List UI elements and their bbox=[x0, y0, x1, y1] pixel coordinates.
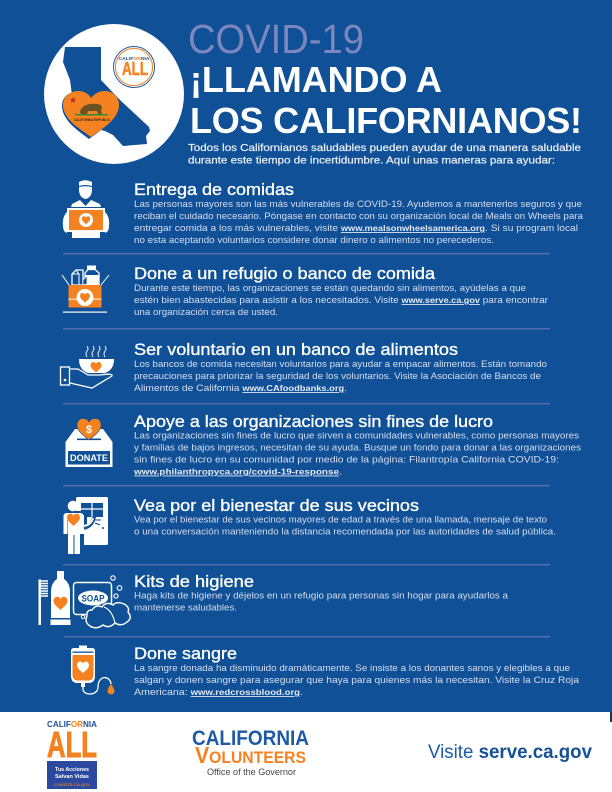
intro text: Todos los Californianos saludables pueden ayudar de una manera saludable bbox=[188, 143, 581, 154]
title bbox=[188, 16, 582, 141]
body text bbox=[134, 359, 547, 394]
panel: entrega de comidas bbox=[63, 180, 584, 246]
body text: entregar comida a los más vulnerables, visite www.mealsonwheelsamerica.org . Si su program local bbox=[134, 223, 578, 234]
icon: toothbrush, toothpaste and soap: SOAP bbox=[82, 594, 104, 604]
icon: person knocking at door bbox=[60, 497, 108, 556]
body text: Durante este tiempo, las organizaciones se están quedando sin alimentos, ayúdelas a que bbox=[134, 283, 526, 294]
body text: mantenerse saludables. bbox=[134, 602, 237, 614]
icon: California state shape bbox=[63, 47, 150, 146]
logo: California for All: ALL bbox=[47, 724, 97, 765]
body text bbox=[134, 514, 556, 538]
heading: Apoye a las organizaciones sin fines de lucro bbox=[134, 412, 493, 431]
body text: precauciones para priorizar la seguridad de los voluntarios. Visite la Asociación de Bancos de bbox=[134, 371, 541, 382]
intro text bbox=[188, 143, 581, 166]
body text: y familias de bajos ingresos, necesitan de su ayuda. Busque un fondo para donar a las organizaciones bbox=[134, 442, 581, 454]
icon: orange heart with California flag: CALIFORNIA REPUBLIC bbox=[74, 118, 110, 122]
icon: donate box with heart: DONATE bbox=[70, 453, 108, 463]
body text bbox=[133, 430, 581, 478]
logo: California map in white circle bbox=[44, 24, 184, 164]
heading: Entrega de comidas bbox=[134, 180, 294, 199]
body text: no esta aceptando voluntarios considere donar dinero o alimentos no perecederos. bbox=[134, 235, 494, 246]
icon: hand holding bowl bbox=[60, 346, 114, 388]
logo: California for All: covid19.ca.gov bbox=[54, 782, 91, 787]
icon: donate box with heart: $ bbox=[86, 424, 92, 436]
body text: Vea por el bienestar de sus vecinos mayores de edad a través de una llamada, mensaje de texto bbox=[134, 514, 547, 526]
logo: California Volunteers: Office of the Governor bbox=[207, 767, 296, 778]
heading: Vea por el bienestar de sus vecinos bbox=[134, 496, 419, 515]
body text bbox=[134, 283, 548, 318]
panel: done a un refugio o banco de comida bbox=[62, 264, 548, 318]
body text: Las personas mayores son las más vulnerables de COVID-19. Ayudemos a mantenerlos seguros y que bbox=[134, 199, 582, 210]
badge: California for All: ALL bbox=[122, 59, 148, 79]
call to action: visit serve.ca.gov: Visite serve.ca.gov bbox=[428, 741, 592, 763]
title: COVID-19 bbox=[188, 16, 364, 62]
body text: una organización cerca de usted. bbox=[134, 307, 278, 318]
body text: Alimentos de California www.CAfoodbanks.org . bbox=[134, 383, 347, 394]
panel: kits de higiene bbox=[38, 571, 509, 628]
panel: ser voluntario en un banco de alimentos bbox=[60, 340, 547, 394]
logo: California Volunteers: VOLUNTEERS bbox=[195, 742, 306, 768]
title: ¡LLAMANDO A bbox=[190, 59, 442, 100]
icon: donation box with food bbox=[62, 266, 109, 313]
logo: California for All: Tus Acciones bbox=[55, 767, 89, 773]
heading: Done sangre bbox=[134, 644, 237, 663]
body text: sin fines de lucro en su comunidad por medio de la página: Filantropía California COVID-19: bbox=[134, 454, 559, 466]
body text: o una conversación manteniendo la distancia recomendada por las autoridades de salud pública. bbox=[134, 526, 556, 538]
heading: Ser voluntario en un banco de alimentos bbox=[134, 340, 458, 359]
icon: delivery person with box bbox=[63, 180, 109, 238]
body text: La sangre donada ha disminuido dramáticamente. Se insiste a los donantes sanos y elegibles a que bbox=[134, 663, 570, 674]
body text: Los bancos de comida necesitan voluntarios para ayudar a empacar alimentos. Están tomando bbox=[134, 359, 547, 370]
body text: Las organizaciones sin fines de lucro que sirven a comunidades vulnerables, como personas mayores bbox=[134, 430, 579, 442]
heading: Kits de higiene bbox=[134, 572, 254, 591]
body text bbox=[134, 199, 584, 246]
icon: toothbrush, toothpaste and soap bbox=[38, 571, 130, 628]
logo: California for All bbox=[47, 719, 97, 789]
body text: reciban el cuidado necesario. Póngase en contacto con su organización local de Meals on Wheels para bbox=[134, 211, 584, 222]
intro text: durante este tiempo de incertidumbre. Aquí unas maneras para ayudar: bbox=[188, 156, 555, 166]
logo: California Volunteers: CALIFORNIA bbox=[192, 727, 309, 750]
icon: blood bag bbox=[71, 646, 114, 694]
body text: Americana: www.redcrossblood.org . bbox=[134, 687, 303, 698]
icon: donate box with heart bbox=[66, 418, 112, 467]
logo: California for All: Salvan Vidas bbox=[55, 774, 89, 780]
panel: apoye a las organizaciones sin fines de lucro bbox=[66, 412, 581, 478]
title: LOS CALIFORNIANOS! bbox=[190, 100, 582, 141]
body text: Haga kits de higiene y déjelos en un refugio para personas sin hogar para ayudarlos a bbox=[134, 590, 509, 602]
badge: California for All bbox=[114, 46, 154, 88]
logo: California Volunteers bbox=[192, 727, 309, 778]
badge: California for All: CALIFORNIA bbox=[118, 56, 150, 62]
body text bbox=[134, 590, 509, 614]
heading: Done a un refugio o banco de comida bbox=[134, 264, 436, 283]
body text: www.philanthropyca.org/covid-19-response . bbox=[133, 466, 342, 478]
panel: done sangre bbox=[71, 644, 580, 698]
body text: estén bien abastecidas para asistir a los necesitados. Visite www.serve.ca.gov para encontrar bbox=[134, 295, 548, 306]
body text bbox=[134, 663, 580, 698]
logo: California for All: CALIFORNIA bbox=[47, 719, 97, 729]
body text: salgan y donen sangre para asegurar que haya para quienes más la necesitan. Visite la Cruz Roja bbox=[134, 675, 580, 686]
panel: vea por el bienestar de sus vecinos bbox=[60, 496, 556, 556]
